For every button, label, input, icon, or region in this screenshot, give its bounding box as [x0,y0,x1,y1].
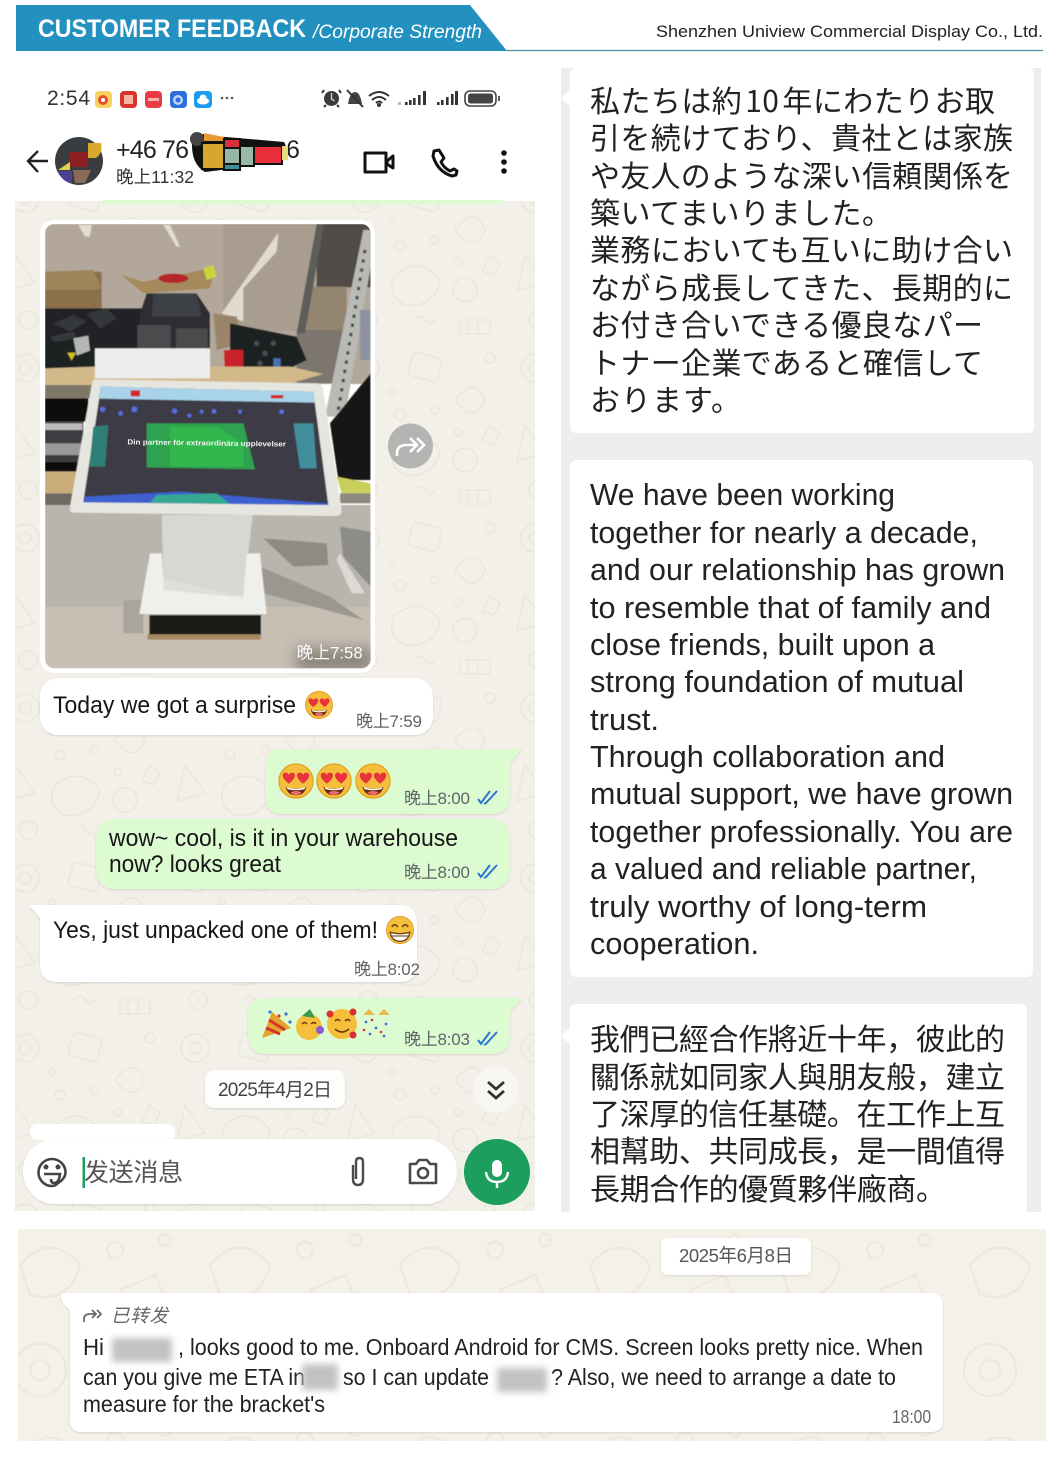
message: today we got a surprise: 晚上7:59 [356,712,422,731]
card: Japanese testimonial: ながら成長してきた、長期的に [590,264,1013,308]
icon: video call [365,153,393,172]
card: Traditional Chinese testimonial: 了深厚的信任基礎。在工作上互 [590,1090,1005,1134]
card: English testimonial: a valued and reliable partner, [590,852,977,886]
message: is it in your warehouse: now? looks great [109,851,281,878]
app notification icons [95,91,233,108]
title: CUSTOMER FEEDBACK [38,15,306,43]
card: Japanese testimonial: おります。 [590,376,741,420]
message bubble: 18:00 [892,1407,931,1427]
message: is it in your warehouse: 晚上8:00 [404,863,470,882]
contact header: 晚上11:32 [116,167,194,187]
card: English testimonial: We have been working [590,478,895,512]
contact header: +46 76 [116,136,189,164]
mic button [464,1139,530,1205]
message input: 发送消息 [84,1159,183,1187]
status bar [47,87,500,110]
emoji: party face [296,1009,324,1040]
icon: back arrow [28,151,48,172]
message: today we got a surprise: Today we got a surprise [53,692,296,719]
icon: forward button [388,424,433,468]
card: English testimonial [570,460,1033,977]
contact header: 6 [286,136,300,164]
message: is it in your warehouse: wow~ cool, is it in your warehouse [108,825,458,852]
card: Japanese testimonial: 私たちは約10年にわたりお取 [590,77,995,121]
card: English testimonial: together for nearly a decade, [590,516,978,550]
card: English testimonial: cooperation. [590,927,759,961]
date pill: 2025-6-8: 2025年6月8日 [679,1245,793,1266]
card: Traditional Chinese testimonial [561,1004,1027,1212]
message bubble: 已转发 [111,1305,170,1326]
card: Japanese testimonial: お付き合いできる優良なパー [590,301,983,345]
card: English testimonial: truly worthy of long-term [590,890,927,924]
system status icons [322,90,500,107]
icon: attach [353,1158,363,1185]
photo: kiosk in warehouse: Din partner för extraordinära upplevelser [127,437,286,449]
message bubble: , looks good to me. Onboard Android for CMS. Screen looks pretty nice. When [178,1334,923,1360]
date pill: 2025-4-2 [205,1070,345,1108]
date pill: 2025-4-2: 2025年4月2日 [218,1079,332,1101]
photo message [40,220,375,673]
photo: kiosk in warehouse: 晚上7:58 [297,644,363,663]
card: Japanese testimonial: 業務においても互いに助け合い [590,226,1013,270]
message input [23,1139,457,1204]
company name: Shenzhen Uniview Commercial Display Co., Ltd. [656,22,1043,41]
card: English testimonial: Through collaboration and [590,740,945,774]
panel: forwarded message screenshot [18,1229,1046,1441]
message: heart eyes: 晚上8:00 [404,789,470,808]
message bubble: so I can update [343,1364,489,1390]
message: party emojis: 晚上8:03 [404,1030,470,1049]
emoji: smiling with hearts [326,1008,357,1039]
card: Japanese testimonial: や友人のような深い信頼関係を [590,152,1013,196]
redaction mosaic [190,132,288,172]
photo: kiosk in warehouse [45,224,373,672]
message: just unpacked one: Yes, just unpacked one of them! [53,917,378,944]
card: Japanese testimonial: 築いてまいりました。 [590,189,892,233]
chat wallpaper [15,200,535,1211]
contact avatar [55,137,103,185]
icon: scroll down [473,1067,519,1113]
message bubble: can you give me ETA in [83,1364,305,1390]
card: Japanese testimonial: 引を続けており、貴社とは家族 [590,114,1013,158]
message: is it in your warehouse [96,819,510,889]
panel: chat screenshot [15,87,535,1211]
message: just unpacked one: 晚上8:02 [354,960,420,979]
message: just unpacked one [29,905,420,982]
icon: phone [433,150,457,176]
message bubble: measure for the bracket's [83,1391,325,1417]
card: Traditional Chinese testimonial: 我們已經合作將近十年，彼此的 [590,1015,1005,1059]
header banner [16,5,1043,51]
message bubble: Hi [83,1334,104,1360]
card: English testimonial: and our relationship has grown [590,553,1005,587]
icon: sticker [38,1159,66,1186]
message: today we got a surprise [40,678,433,735]
message: party emojis [248,998,522,1054]
icon: forwarded [84,1310,101,1322]
card: Traditional Chinese testimonial: 關係就如同家人與朋友般，建立 [590,1053,1005,1097]
status bar: 2:54 [47,87,90,110]
panel: testimonial column [561,68,1041,1212]
icon: camera [410,1160,436,1183]
icon: more menu [501,150,507,174]
card: Japanese testimonial [561,68,1034,433]
emoji: party popper [262,1010,292,1038]
card: English testimonial: mutual support, we have grown [590,777,1013,811]
message bubble [61,1293,943,1432]
blurred redactions [112,1338,547,1392]
card: English testimonial: strong foundation of mutual [590,665,964,699]
emoji: confetti [363,1009,390,1037]
message bubble: ? Also, we need to arrange a date to [551,1364,896,1390]
message: heart eyes [265,749,522,814]
card: Traditional Chinese testimonial: 相幫助、共同成長，是一間值得 [590,1127,1005,1171]
card: English testimonial: together professionally. You are [590,815,1013,849]
subtitle: /Corporate Strength [311,21,482,43]
card: Traditional Chinese testimonial: 長期合作的優質夥伴廠商。 [590,1165,946,1209]
contact header [28,132,507,187]
card: English testimonial: close friends, built upon a [590,628,935,662]
card: Japanese testimonial: トナー企業であると確信して [590,339,983,383]
date pill: 2025-6-8 [661,1238,811,1275]
card: English testimonial: to resemble that of family and [590,591,991,625]
card: English testimonial: trust. [590,703,659,737]
